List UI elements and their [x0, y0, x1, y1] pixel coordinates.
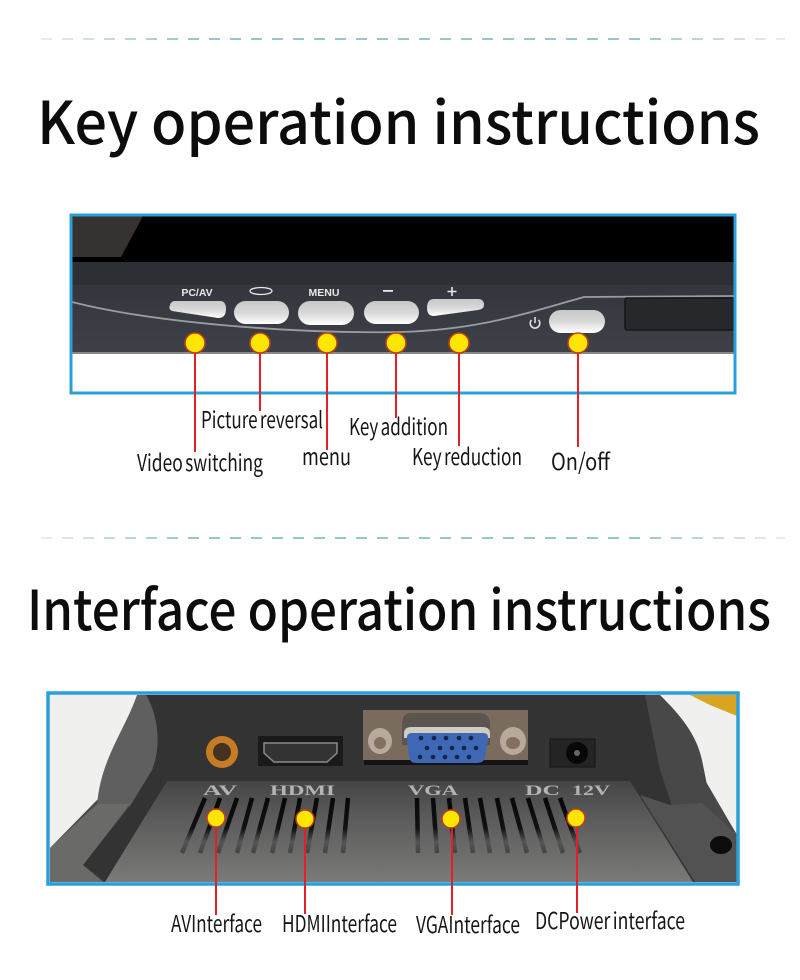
housing: solid backing behind base: [50, 765, 737, 882]
screw hole: [710, 836, 732, 854]
callout: AV interface: AVInterface: [171, 905, 262, 939]
callout: picture reversal: [201, 333, 323, 435]
ventilation slots: [182, 798, 580, 853]
housing: dark side walls and back wall: [83, 695, 737, 882]
port: VGA: [363, 710, 528, 765]
screen: [72, 216, 734, 262]
housing: left lower base: [50, 804, 130, 882]
title: key operation: Key operation instructions: [37, 76, 760, 161]
button: picture reversal: [234, 288, 289, 324]
housing: right lower base: [640, 795, 737, 882]
button: menu: [298, 287, 354, 325]
port: HDMI: [258, 736, 343, 766]
panel: monitor front buttons: [71, 215, 735, 393]
callout: HDMI interface: [282, 810, 397, 939]
callout: picture reversal: Picture reversal: [201, 401, 323, 435]
printed port labels: AV: [203, 783, 238, 799]
housing: right upper wing: [645, 695, 737, 850]
callout: AV interface: [171, 809, 262, 939]
button: power: [530, 310, 605, 333]
port: DC jack: [550, 739, 595, 767]
callout: menu: [302, 333, 351, 472]
button: plus: [427, 287, 484, 316]
callout: video switching: [137, 333, 263, 478]
panel: monitor rear interfaces: [48, 693, 738, 884]
callout: on/off: [551, 333, 611, 477]
port: AV jack: [206, 736, 238, 768]
button: menu: MENU: [309, 287, 339, 299]
callout: key reduction: Key reduction: [412, 438, 522, 472]
printed port labels: VGA: [408, 783, 459, 799]
button: minus: [364, 290, 419, 324]
housing: left upper wing: [97, 695, 158, 806]
callout: key reduction: [412, 333, 522, 472]
callout: DC power interface: [535, 809, 685, 936]
callout: video switching: Video switching: [137, 444, 263, 478]
callout: VGA interface: VGAInterface: [416, 906, 520, 940]
button: PC/AV: [169, 287, 226, 318]
callout: HDMI interface: HDMIInterface: [282, 905, 397, 939]
printed port labels: 12V: [572, 783, 611, 799]
button: PC/AV: PC/AV: [181, 287, 213, 299]
vent floor: [105, 781, 693, 882]
callout: VGA interface: [416, 810, 520, 940]
printed port labels: HDMI: [270, 783, 336, 799]
callout: on/off: On/off: [551, 443, 611, 477]
callout: key addition: Key addition: [349, 408, 448, 442]
callout: menu: menu: [302, 438, 351, 472]
callout: key addition: [349, 333, 448, 442]
printed port labels: DC: [525, 783, 560, 799]
printed port labels: [203, 783, 611, 799]
callout: DC power interface: DCPower interface: [535, 902, 685, 936]
